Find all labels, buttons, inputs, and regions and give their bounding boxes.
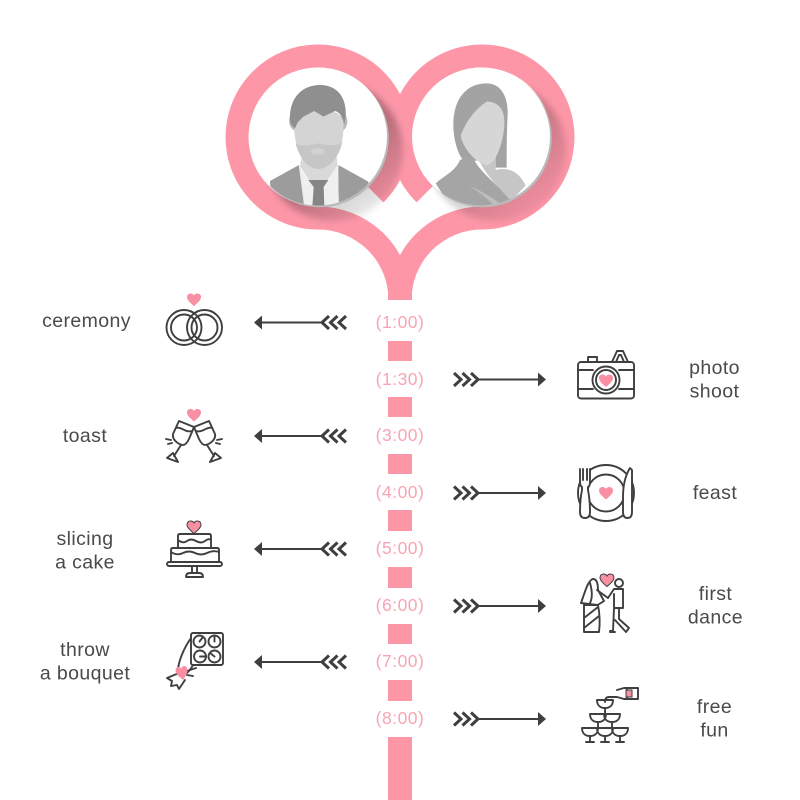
arrow: cake — [254, 542, 346, 556]
label: throw a bouquet: throw — [60, 639, 110, 661]
neck — [300, 157, 338, 180]
face — [294, 111, 344, 146]
time labels — [376, 312, 424, 728]
arrow: photo — [454, 372, 546, 386]
scarf fold — [470, 186, 499, 204]
icon: champagne tower — [582, 688, 638, 742]
body — [436, 159, 510, 206]
neck and chest — [480, 158, 526, 199]
arrow: bouquet — [254, 655, 346, 669]
time labels: (3:00) — [376, 425, 424, 445]
label: slicing a cake: slicing — [56, 528, 114, 550]
icon: wedding cake — [167, 521, 222, 577]
portrait: groom — [249, 68, 389, 212]
time labels: (8:00) — [376, 708, 424, 728]
time labels: (6:00) — [376, 595, 424, 615]
shirt — [299, 165, 339, 205]
label: free fun: free — [697, 696, 732, 718]
time labels: (4:00) — [376, 482, 424, 502]
label: first dance: first — [699, 583, 732, 605]
icon: camera — [578, 351, 634, 398]
time labels: (1:00) — [376, 312, 424, 332]
label: throw a bouquet: a bouquet — [40, 662, 130, 684]
arrow: ceremony — [254, 316, 346, 330]
icon: wedding rings — [166, 294, 222, 345]
label: free fun: fun — [700, 720, 729, 742]
label: photo shoot: photo — [689, 357, 740, 379]
arrow: fun — [454, 712, 546, 726]
label: first dance: dance — [688, 606, 743, 628]
arrow: feast — [454, 486, 546, 500]
heart ribbon — [237, 56, 563, 300]
tie — [308, 180, 328, 207]
label: toast: toast — [63, 425, 107, 447]
central timeline strip — [388, 341, 412, 800]
time labels: (5:00) — [376, 538, 424, 558]
icon: bouquet — [167, 633, 223, 689]
icon: plate and cutlery — [578, 465, 634, 521]
jacket — [270, 165, 368, 206]
label: feast: feast — [693, 482, 737, 504]
face — [461, 102, 504, 165]
label: photo shoot: shoot — [690, 380, 740, 402]
label: slicing a cake: a cake — [55, 552, 115, 574]
time labels: (7:00) — [376, 651, 424, 671]
portrait: bride — [412, 68, 552, 208]
arrow: dance — [454, 599, 546, 613]
hair — [453, 83, 508, 168]
beard — [296, 142, 342, 169]
hair — [290, 85, 346, 128]
label: ceremony: ceremony — [42, 310, 131, 332]
icon: toasting glasses — [166, 409, 222, 462]
icon: dancing couple — [581, 574, 629, 632]
ears — [289, 115, 347, 131]
arrow: toast — [254, 429, 346, 443]
time labels: (1:30) — [376, 369, 424, 389]
portrait shadows — [263, 81, 566, 221]
